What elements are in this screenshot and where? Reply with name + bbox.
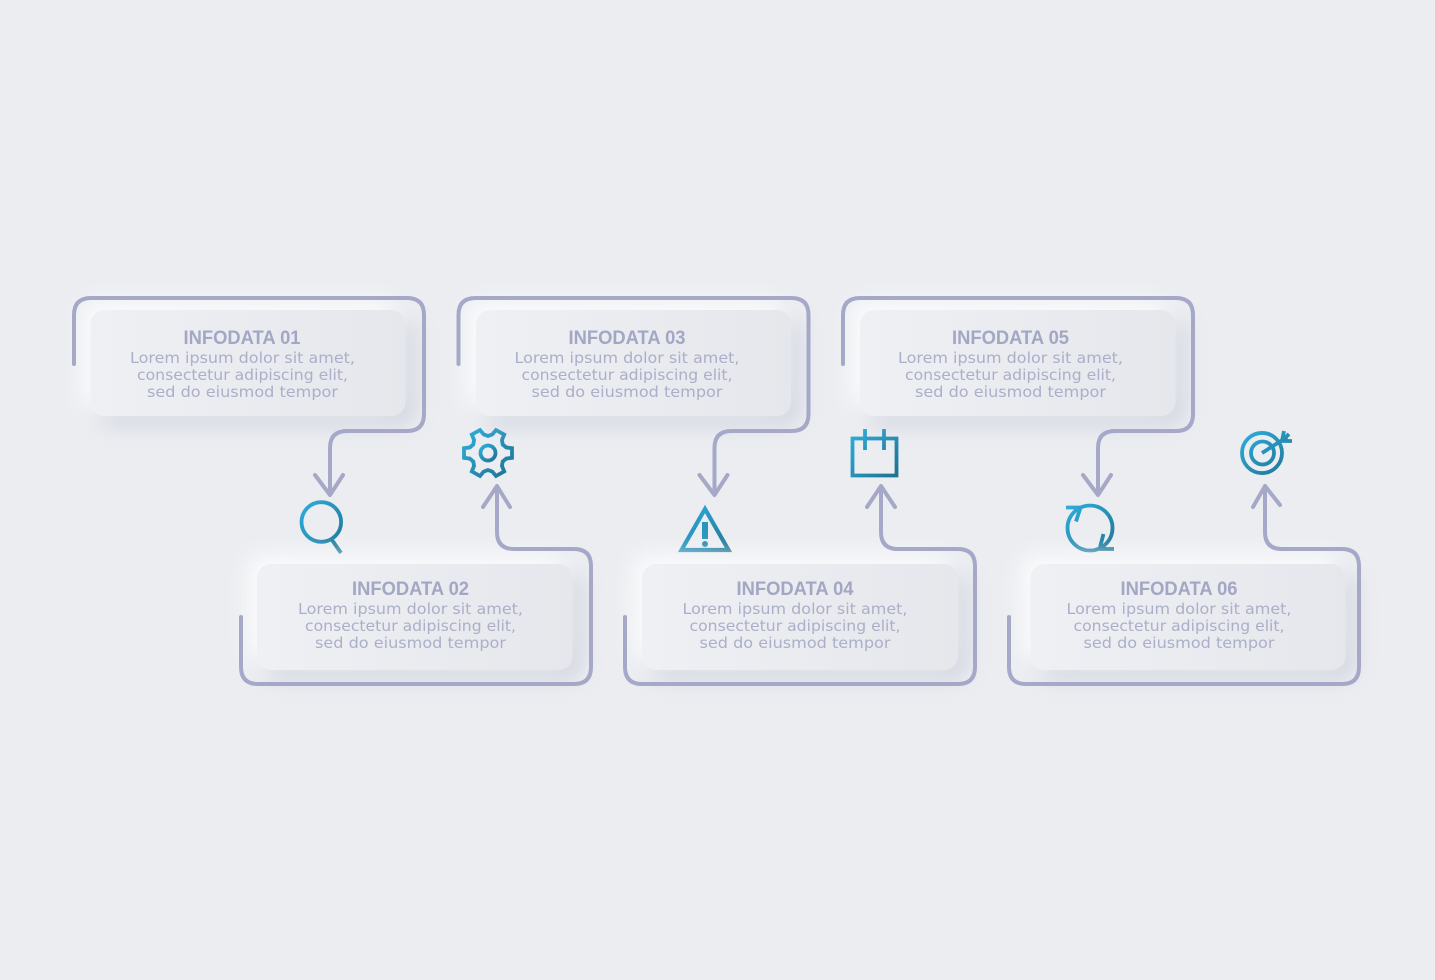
text 02: sed do eiusmod tempor [315,634,507,652]
heading 05: INFODATA 05 [952,328,1069,349]
panel: infodata 05 [843,298,1193,495]
icon: warning triangle [682,509,728,550]
text 02 [298,600,523,652]
panel: infodata 03 [458,298,808,495]
card 02 [257,564,572,670]
arrow 04 [625,486,975,684]
card 04 [642,564,958,670]
text 01: consectetur adipiscing elit, [137,366,348,384]
text 04: consectetur adipiscing elit, [690,617,900,635]
icon: target [1242,431,1292,473]
text 04: Lorem ipsum dolor sit amet, [682,600,908,618]
panel: infodata 02 [241,486,591,684]
text 01: sed do eiusmod tempor [147,383,339,401]
arrow 01 [74,298,424,495]
panel: infodata 04 [625,486,975,684]
text 02: Lorem ipsum dolor sit amet, [298,600,523,618]
icon: calendar [852,429,896,476]
arrow 06 [1009,486,1359,684]
text 03 [514,349,740,401]
icon: refresh [1066,506,1114,550]
text 03: consectetur adipiscing elit, [522,366,732,384]
arrow 05 [843,298,1193,495]
text 04 [682,600,908,652]
heading 02: INFODATA 02 [352,579,469,600]
icon: magnifier [302,502,341,553]
text 05: Lorem ipsum dolor sit amet, [898,349,1123,367]
panel: infodata 01 [74,298,424,495]
text 02: consectetur adipiscing elit, [305,617,516,635]
heading 01: INFODATA 01 [184,328,301,349]
text 05: consectetur adipiscing elit, [905,366,1116,384]
card 05 [860,310,1176,416]
card 01 [90,310,406,416]
text 06 [1066,600,1292,652]
text 03: Lorem ipsum dolor sit amet, [514,349,740,367]
text 06: consectetur adipiscing elit, [1074,617,1284,635]
text 06: Lorem ipsum dolor sit amet, [1066,600,1292,618]
arrow 02 [241,486,591,684]
arrow 03 [458,298,808,495]
text 05: sed do eiusmod tempor [915,383,1107,401]
text 03: sed do eiusmod tempor [532,383,723,401]
text 01 [130,349,355,401]
text 06: sed do eiusmod tempor [1084,634,1275,652]
heading 06: INFODATA 06 [1120,579,1238,600]
card 03 [476,310,791,416]
card 06 [1030,564,1346,670]
text 04: sed do eiusmod tempor [700,634,891,652]
heading 04: INFODATA 04 [736,579,854,600]
panel: infodata 06 [1009,486,1359,684]
icon: gear [464,430,512,476]
heading 03: INFODATA 03 [568,328,686,349]
text 05 [898,349,1123,401]
text 01: Lorem ipsum dolor sit amet, [130,349,355,367]
